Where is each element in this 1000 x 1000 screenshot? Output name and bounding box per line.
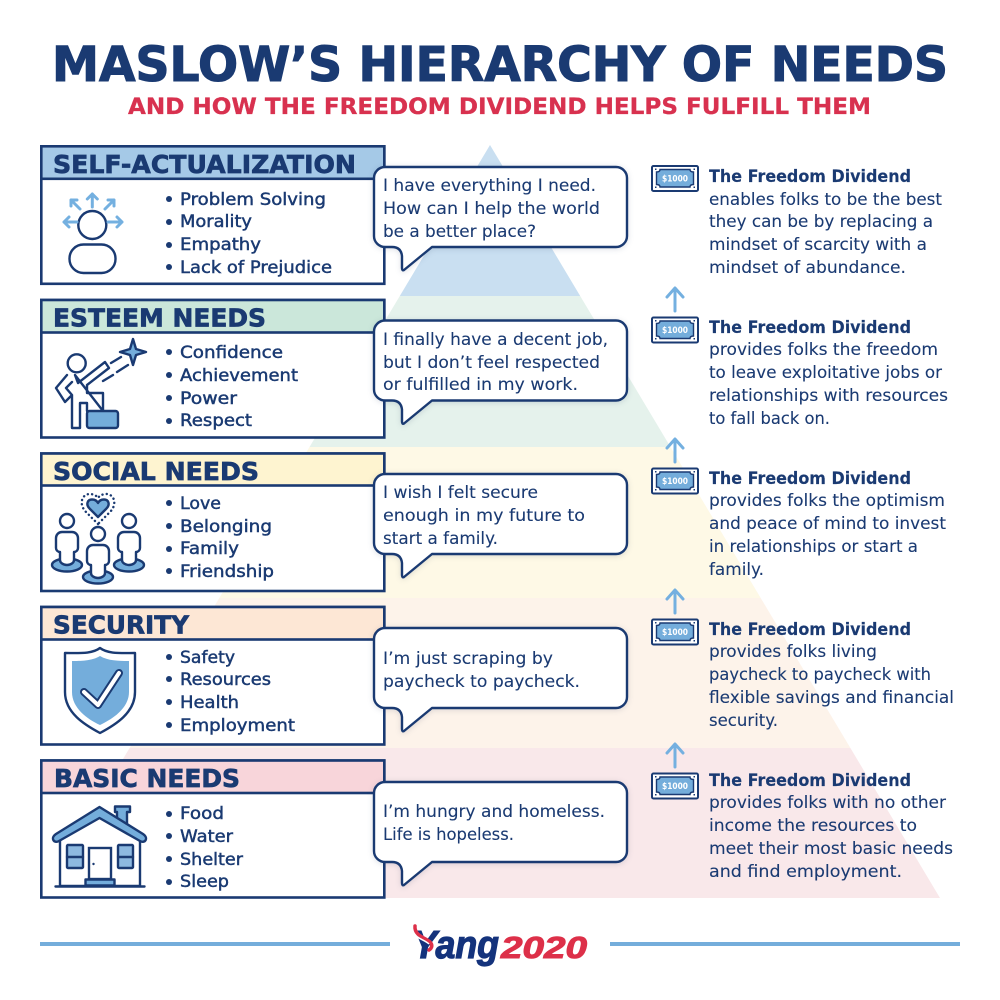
list: esteem needs: Achievement bbox=[180, 366, 299, 385]
logo: Yang 2020 bbox=[413, 924, 587, 967]
icon: dollar bill 4 bbox=[652, 620, 698, 644]
list: security: Employment bbox=[180, 716, 296, 735]
icon: dollar bill 2: $1000 bbox=[662, 326, 688, 336]
text block: security benefit: paycheck to paycheck with bbox=[709, 665, 931, 685]
panel: basic needs bbox=[41, 760, 384, 898]
list: basic needs: Shelter bbox=[180, 850, 243, 869]
text block: basic benefit: meet their most basic needs bbox=[709, 839, 953, 859]
list: basic needs: Food bbox=[180, 804, 224, 823]
text block: social benefit: and peace of mind to invest bbox=[709, 514, 946, 534]
speech bubble: esteem bbox=[374, 320, 627, 424]
text block: basic benefit bbox=[709, 771, 953, 882]
icon: dollar bill 3: $1000 bbox=[662, 477, 688, 487]
list: self-actualization: Morality bbox=[180, 212, 252, 231]
header: self-actualization: SELF-ACTUALIZATION bbox=[53, 150, 356, 179]
text block: security benefit: flexible savings and financial bbox=[709, 688, 954, 708]
list: social needs: Family bbox=[180, 539, 239, 558]
list: social needs: Friendship bbox=[180, 562, 274, 581]
logo: Yang 2020: 2020 bbox=[500, 930, 587, 965]
header: security: SECURITY bbox=[53, 610, 190, 640]
list: esteem needs: Respect bbox=[180, 411, 253, 430]
arrow: security to social bbox=[667, 590, 683, 613]
background pyramid bbox=[40, 145, 940, 898]
text block: security benefit: provides folks living bbox=[709, 642, 877, 662]
icon: dollar bill 1: $1000 bbox=[662, 174, 688, 184]
list: security bbox=[166, 648, 296, 735]
icon: shield with check bbox=[65, 648, 135, 733]
icon: person reaching for star bbox=[56, 339, 146, 428]
subtitle: AND HOW THE FREEDOM DIVIDEND HELPS FULFILL THEM bbox=[128, 94, 871, 120]
speech bubble: social: start a family. bbox=[383, 529, 498, 549]
list: self-actualization: Problem Solving bbox=[180, 190, 326, 209]
panel: esteem needs bbox=[41, 300, 384, 438]
icon: house bbox=[53, 806, 146, 886]
text block: self-actualization benefit: mindset of scarcity with a bbox=[709, 235, 927, 255]
list: self-actualization: Lack of Prejudice bbox=[180, 258, 332, 277]
list: self-actualization: Empathy bbox=[180, 235, 261, 254]
list: esteem needs: Confidence bbox=[180, 343, 283, 362]
icon: dollar bill 1 bbox=[652, 166, 698, 191]
speech bubble: social bbox=[374, 474, 627, 577]
text block: esteem benefit bbox=[709, 318, 948, 429]
text block: security benefit bbox=[709, 620, 954, 731]
text block: security benefit: The Freedom Dividend bbox=[709, 620, 911, 640]
text block: security benefit: security. bbox=[709, 711, 778, 731]
panel: social needs bbox=[41, 454, 384, 591]
speech bubble: self-actualization bbox=[374, 167, 627, 270]
icon: dollar bill 2 bbox=[652, 318, 698, 342]
text block: basic benefit: and find employment. bbox=[709, 862, 902, 882]
speech bubble: self-actualization: be a better place? bbox=[383, 222, 536, 242]
text block: self-actualization benefit: they can be by replacing a bbox=[709, 212, 933, 232]
text block: social benefit bbox=[709, 469, 946, 580]
speech bubble: social: I wish I felt secure bbox=[383, 483, 538, 503]
speech bubble: social: enough in my future to bbox=[383, 506, 585, 526]
speech bubble: self-actualization: How can I help the world bbox=[383, 199, 600, 219]
speech bubble: esteem: I finally have a decent job, bbox=[383, 330, 608, 350]
icon: three people and heart bbox=[52, 494, 144, 584]
text block: social benefit: provides folks the optimism bbox=[709, 491, 945, 511]
text block: basic benefit: The Freedom Dividend bbox=[709, 771, 911, 791]
text block: self-actualization benefit: mindset of abundance. bbox=[709, 258, 906, 278]
arrow: basic to security bbox=[667, 744, 683, 767]
speech bubble: basic bbox=[374, 782, 627, 885]
logo: Yang 2020: Yang bbox=[413, 924, 499, 967]
text block: basic benefit: provides folks with no other bbox=[709, 793, 946, 813]
text block: esteem benefit: to fall back on. bbox=[709, 409, 830, 429]
list: esteem needs bbox=[166, 343, 299, 430]
icon: dollar bill 5: $1000 bbox=[662, 782, 688, 792]
footer rule left bbox=[40, 942, 390, 946]
list: social needs bbox=[166, 494, 274, 581]
header: basic needs bbox=[41, 760, 384, 793]
speech bubble: security: I’m just scraping by bbox=[383, 649, 553, 669]
list: security: Health bbox=[180, 693, 239, 712]
list: security: Resources bbox=[180, 670, 271, 689]
list: esteem needs: Power bbox=[180, 389, 237, 408]
panel: self-actualization bbox=[41, 146, 384, 284]
list: basic needs: Water bbox=[180, 827, 233, 846]
header: esteem needs bbox=[41, 300, 384, 332]
text block: esteem benefit: relationships with resources bbox=[709, 386, 948, 406]
speech bubble: self-actualization: I have everything I need. bbox=[383, 176, 596, 196]
arrow: social to esteem bbox=[667, 439, 683, 462]
text block: basic benefit: income the resources to bbox=[709, 816, 917, 836]
text block: esteem benefit: to leave exploitative jobs or bbox=[709, 363, 942, 383]
text block: self-actualization benefit: enables folks to be the best bbox=[709, 190, 942, 210]
text block: social benefit: family. bbox=[709, 560, 764, 580]
header: basic needs: BASIC NEEDS bbox=[54, 764, 240, 793]
list: social needs: Belonging bbox=[180, 517, 272, 536]
header: social needs: SOCIAL NEEDS bbox=[53, 457, 259, 486]
header: esteem needs: ESTEEM NEEDS bbox=[53, 304, 266, 332]
list: social needs: Love bbox=[180, 494, 221, 513]
icon: dollar bill 3 bbox=[652, 468, 698, 494]
header: security bbox=[41, 607, 384, 640]
text block: esteem benefit: provides folks the freedom bbox=[709, 340, 938, 360]
icon: dollar bill 5 bbox=[652, 774, 698, 798]
text block: self-actualization benefit: The Freedom Dividend bbox=[709, 167, 911, 187]
text block: social benefit: in relationships or start a bbox=[709, 537, 918, 557]
icon: person with arrows bbox=[64, 194, 122, 273]
list: self-actualization bbox=[166, 190, 332, 277]
text block: self-actualization benefit bbox=[709, 167, 942, 278]
text block: social benefit: The Freedom Dividend bbox=[709, 469, 911, 489]
list: basic needs: Sleep bbox=[180, 872, 229, 891]
arrow: esteem to self-actualization bbox=[667, 288, 683, 311]
speech bubble: esteem: or fulfilled in my work. bbox=[383, 375, 578, 395]
speech bubble: security bbox=[374, 628, 627, 731]
speech bubble: security: paycheck to paycheck. bbox=[383, 672, 580, 692]
title: MASLOW’S HIERARCHY OF NEEDS bbox=[52, 37, 948, 93]
speech bubble: esteem: but I don’t feel respected bbox=[383, 353, 600, 373]
footer rule right bbox=[610, 942, 960, 946]
list: basic needs bbox=[166, 804, 243, 891]
header: social needs bbox=[41, 454, 384, 486]
text block: esteem benefit: The Freedom Dividend bbox=[709, 318, 911, 338]
speech bubble: basic: I’m hungry and homeless. bbox=[383, 802, 605, 822]
speech bubble: basic: Life is hopeless. bbox=[383, 825, 514, 845]
icon: dollar bill 4: $1000 bbox=[662, 628, 688, 638]
list: security: Safety bbox=[180, 648, 235, 667]
panel: security bbox=[41, 607, 384, 744]
